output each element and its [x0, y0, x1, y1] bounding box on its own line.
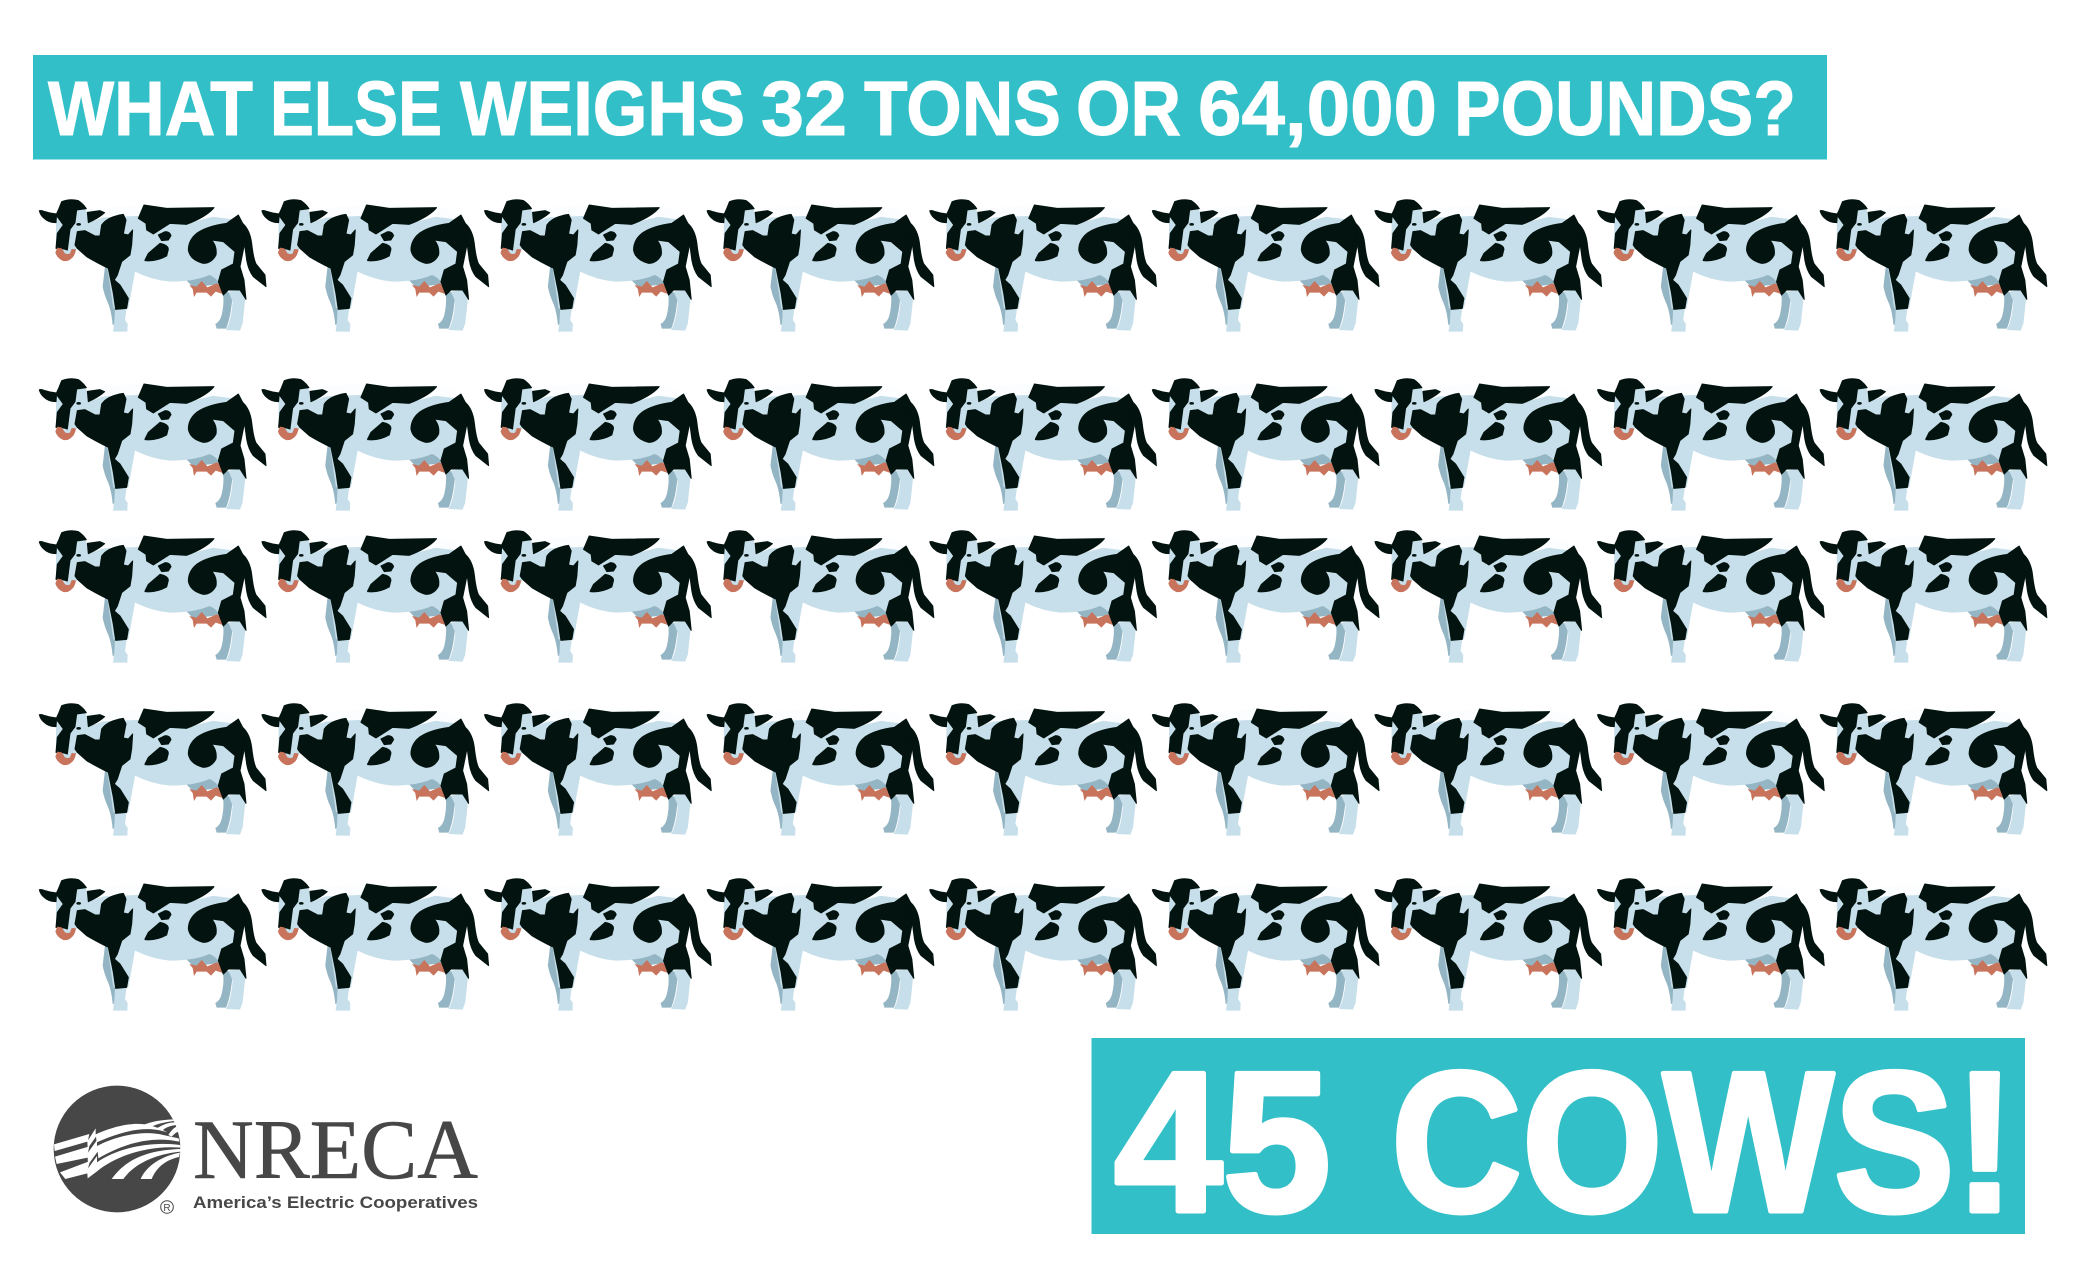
cow row 1	[39, 200, 2047, 332]
title banner: 64,000	[1198, 66, 1437, 152]
registered mark: R	[163, 1203, 171, 1214]
title banner: 32	[761, 66, 847, 152]
answer callout: COWS!	[1391, 1031, 2015, 1254]
cow row 2	[39, 379, 2047, 511]
answer callout	[1092, 1031, 2025, 1254]
title banner: ELSE	[270, 66, 442, 152]
title banner	[33, 55, 1827, 160]
registered mark	[161, 1201, 173, 1214]
cow grid: 45 cows	[39, 200, 2047, 1011]
title banner: TONS	[864, 66, 1061, 152]
icon: logo circle with lightning and furrows	[54, 1086, 181, 1212]
cow row 3	[39, 531, 2047, 663]
answer callout: 45	[1114, 1031, 1331, 1254]
cow row 4	[39, 704, 2047, 836]
NRECA logo	[54, 1086, 478, 1214]
wordmark: NRECA	[193, 1103, 478, 1197]
title banner: WHAT	[48, 66, 253, 152]
cow row 5	[39, 879, 2047, 1011]
title banner: WEIGHS	[460, 66, 745, 152]
title banner: OR	[1076, 66, 1181, 152]
tagline: America’s Electric Cooperatives	[193, 1193, 478, 1212]
title banner: POUNDS?	[1454, 66, 1796, 152]
